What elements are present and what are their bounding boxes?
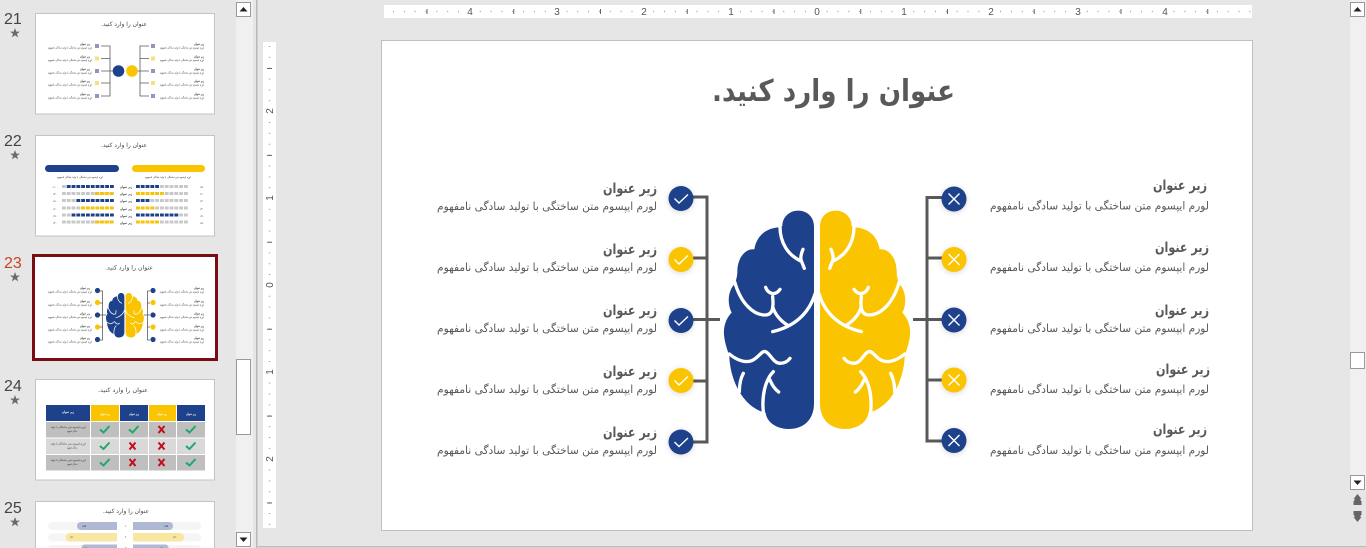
thumbnail: slide 23 (selected): لورم ایپسوم متن ساختگی با تولید سادگی نامفهوم — [160, 315, 204, 320]
thumbnail: slide 25: عنوان را وارد کنید. — [103, 508, 149, 515]
right item 2 — [942, 240, 1209, 274]
thumbnail: slide 23 (selected): لورم ایپسوم متن ساختگی با تولید سادگی نامفهوم — [160, 302, 204, 308]
left item 4: لورم ایپسوم متن ساختگی با تولید سادگی نامفهوم — [437, 383, 657, 396]
thumbnail: slide 23 (selected): زیر عنوان — [194, 336, 204, 340]
vertical ruler: 1 — [265, 195, 276, 201]
thumbnail: slide 21: زیر عنوان — [80, 67, 90, 71]
horizontal ruler: 4 — [467, 7, 473, 18]
thumbnail: slide 22: ٪۵۰ — [200, 222, 204, 225]
thumbnail: slide 22: ٪۳۰ — [200, 200, 204, 203]
thumbnail: slide 22: زیر عنوان — [120, 185, 132, 189]
right item 1: لورم ایپسوم متن ساختگی با تولید سادگی نامفهوم — [990, 200, 1209, 212]
right item 4: لورم ایپسوم متن ساختگی با تولید سادگی نامفهوم — [990, 383, 1209, 396]
vertical ruler: 0 — [265, 282, 276, 288]
thumbnail: slide 21: زیر عنوان — [194, 54, 204, 58]
right item 3 — [942, 303, 1209, 335]
connector: left bracket — [693, 197, 720, 442]
horizontal ruler: 3 — [1075, 7, 1081, 18]
horizontal ruler — [384, 5, 1252, 18]
thumbnail: slide 21: زیر عنوان — [194, 67, 204, 71]
thumbnail: slide 24: زیر عنوان — [100, 412, 110, 416]
thumbnail: slide 21: لورم ایپسوم متن ساختگی با تولید سادگی نامفهوم — [160, 46, 204, 50]
right item 5: لورم ایپسوم متن ساختگی با تولید سادگی نامفهوم — [990, 444, 1209, 457]
slide canvas — [382, 40, 1252, 530]
slide number 24 — [4, 378, 22, 404]
thumbnail: slide 23 (selected): لورم ایپسوم متن ساختگی با تولید سادگی نامفهوم — [48, 315, 92, 320]
horizontal ruler: 1 — [901, 7, 907, 18]
right item 2: لورم ایپسوم متن ساختگی با تولید سادگی نامفهوم — [990, 261, 1209, 274]
left item 4: زیر عنوان — [603, 364, 657, 380]
slide number 21 — [4, 11, 22, 37]
horizontal ruler: 1 — [728, 7, 734, 18]
brain: right yellow hemisphere — [819, 211, 910, 429]
thumbnail: slide 22: ٪۴۰ — [53, 222, 57, 225]
left item 5 — [437, 425, 694, 457]
brain: left blue hemisphere — [724, 211, 815, 429]
thumbnail: slide 21: لورم ایپسوم متن ساختگی با تولید سادگی نامفهوم — [48, 70, 92, 76]
thumbnail: slide 23 (selected): لورم ایپسوم متن ساختگی با تولید سادگی نامفهوم — [48, 302, 92, 308]
thumbnail: slide 22: زیر عنوان — [120, 214, 132, 218]
left item 4 — [437, 364, 694, 396]
thumbnail: slide 25: ٪۵۵ — [164, 525, 169, 528]
left item 2: لورم ایپسوم متن ساختگی با تولید سادگی نامفهوم — [437, 261, 657, 274]
vertical ruler: 1 — [265, 369, 276, 375]
thumbnail: slide 24: زیر عنوان — [157, 412, 167, 416]
thumbnail: slide 25: ٪۷۰ — [70, 536, 74, 539]
thumbnail: slide 24: عنوان را وارد کنید. — [98, 387, 148, 394]
thumbnail: slide 22: ٪۶۰ — [53, 208, 57, 211]
thumbnail: slide 24: لورم ایپسوم متن ساختگی با تولید — [50, 425, 86, 430]
thumbnail: slide 23 (selected): زیر عنوان — [80, 336, 90, 340]
thumbnail: slide 24: زیر عنوان — [62, 410, 74, 414]
thumbnail: slide 22: زیر عنوان — [120, 199, 132, 203]
thumbnail: slide 24: سادگی نامفهوم — [67, 446, 77, 450]
right item 1: زیر عنوان — [1153, 178, 1207, 194]
slide number 22 — [4, 133, 22, 159]
thumbnail: slide 22: ٪۴۰ — [53, 193, 57, 196]
thumbnail: slide 23 (selected): زیر عنوان — [194, 312, 204, 316]
left item 3 — [437, 303, 694, 335]
thumbnail: slide 25: ۰۱ — [124, 525, 126, 528]
thumbnail: slide 25 — [36, 502, 214, 548]
thumbnail: slide 21: زیر عنوان — [194, 42, 204, 46]
thumbnail: slide 21: زیر عنوان — [80, 42, 90, 46]
right item 4: زیر عنوان — [1156, 362, 1210, 378]
right item 1 — [942, 178, 1209, 212]
left item 2: زیر عنوان — [603, 242, 657, 258]
thumbnail: slide 21: زیر عنوان — [80, 54, 90, 58]
thumbnail: slide 24: زیر عنوان — [129, 412, 139, 416]
slide number 23 — [4, 255, 22, 281]
horizontal ruler: 0 — [814, 7, 820, 18]
thumbnail: slide 23 (selected): لورم ایپسوم متن ساختگی با تولید سادگی نامفهوم — [160, 290, 204, 294]
slide number 21: 21 — [4, 11, 22, 28]
thumbnail: slide 25: ٪۵۵ — [82, 525, 87, 528]
connector: right bracket — [913, 198, 942, 441]
thumbnail: slide 23 (selected): زیر عنوان — [194, 324, 204, 328]
right item 5 — [942, 422, 1209, 457]
horizontal ruler: 3 — [554, 7, 560, 18]
thumbnail: slide 21: زیر عنوان — [80, 79, 90, 83]
thumbnail: slide 23 (selected): زیر عنوان — [80, 312, 90, 316]
left item 1: زیر عنوان — [603, 181, 657, 197]
thumbnail: slide 22: لورم ایپسوم متن ساختگی با تولید سادگی نامفهوم — [145, 175, 191, 180]
vertical ruler: 2 — [265, 108, 276, 114]
thumbnail: slide 22: زیر عنوان — [120, 192, 132, 196]
thumbnail: slide 24: سادگی نامفهوم — [67, 462, 77, 467]
thumbnail: slide 21: عنوان را وارد کنید. — [101, 21, 147, 28]
slide number 22: 22 — [4, 133, 22, 150]
right item 3: لورم ایپسوم متن ساختگی با تولید سادگی نامفهوم — [990, 322, 1209, 335]
thumbnail: slide 22: لورم ایپسوم متن ساختگی با تولید سادگی نامفهوم — [57, 175, 103, 180]
thumbnail: slide 22: زیر عنوان — [120, 221, 132, 225]
thumbnail: slide 23 (selected): لورم ایپسوم متن ساختگی با تولید سادگی نامفهوم — [48, 340, 92, 344]
thumbnail: slide 23 (selected): عنوان را وارد کنید. — [105, 264, 153, 272]
status line — [258, 546, 1366, 548]
thumbnail: slide 24: لورم ایپسوم متن ساختگی با تولید — [50, 442, 86, 446]
slide number 23: 23 — [4, 255, 22, 272]
left item 1: لورم ایپسوم متن ساختگی با تولید سادگی نامفهوم — [437, 200, 657, 213]
thumbnail: slide 23 (selected): زیر عنوان — [194, 286, 204, 290]
right item 4 — [942, 362, 1210, 396]
thumbnail: slide 22: ٪۴۰ — [200, 208, 204, 211]
thumbnail: slide 21: لورم ایپسوم متن ساختگی با تولید سادگی نامفهوم — [160, 96, 204, 100]
slide number 25: 25 — [4, 500, 22, 517]
thumbnail: slide 24: لورم ایپسوم متن ساختگی با تولید — [50, 458, 86, 463]
thumbnail: slide 23 (selected): زیر عنوان — [194, 299, 204, 303]
thumbnail: slide 22: ٪۱۰۰ — [52, 186, 58, 189]
thumbnail: slide 21 — [36, 14, 214, 114]
thumbnail: slide 21: لورم ایپسوم متن ساختگی با تولید سادگی نامفهوم — [48, 58, 92, 63]
left item 2 — [437, 242, 694, 274]
left item 5: لورم ایپسوم متن ساختگی با تولید سادگی نامفهوم — [437, 444, 657, 457]
thumbnail panel — [4, 11, 216, 548]
left item 3: زیر عنوان — [603, 303, 657, 319]
title: عنوان را وارد کنید. — [712, 74, 955, 109]
thumbnail: slide 21: زیر عنوان — [80, 92, 90, 96]
thumbnail: slide 23 (selected): زیر عنوان — [80, 286, 90, 290]
thumbnail: slide 21: لورم ایپسوم متن ساختگی با تولید سادگی نامفهوم — [160, 70, 204, 76]
thumbnail: slide 24: زیر عنوان — [186, 412, 196, 416]
left item 1 — [437, 181, 694, 213]
horizontal ruler: 2 — [641, 7, 647, 18]
thumbnail: slide 22: ٪۵۰ — [200, 186, 204, 189]
thumbnail: slide 25: ۰۲ — [124, 536, 127, 539]
thumbnail: slide 22: عنوان را وارد کنید. — [101, 142, 147, 149]
thumbnail: slide 22 — [36, 136, 214, 236]
horizontal ruler: 4 — [1162, 7, 1168, 18]
thumbnail: slide 21: لورم ایپسوم متن ساختگی با تولید سادگی نامفهوم — [160, 58, 204, 63]
thumbnail: slide 21: لورم ایپسوم متن ساختگی با تولید سادگی نامفهوم — [48, 96, 92, 100]
thumbnail: slide 22: ٪۹۰ — [200, 215, 204, 218]
right item 3: زیر عنوان — [1155, 303, 1209, 319]
thumbnail: slide 22: زیر عنوان — [120, 207, 132, 211]
thumbnail: slide 22: ٪۶۰ — [200, 193, 204, 196]
thumbnail: slide 21: لورم ایپسوم متن ساختگی با تولید سادگی نامفهوم — [48, 82, 92, 88]
thumbnail: slide 21: زیر عنوان — [194, 92, 204, 96]
right item 2: زیر عنوان — [1155, 240, 1209, 256]
thumbnail: slide 25: ٪۷۰ — [173, 536, 177, 539]
vertical ruler: 2 — [265, 456, 276, 462]
thumbnail: slide 23 (selected): زیر عنوان — [80, 299, 90, 303]
thumbnail: slide 23 (selected) — [34, 256, 216, 360]
left item 3: لورم ایپسوم متن ساختگی با تولید سادگی نامفهوم — [437, 322, 657, 335]
horizontal ruler: 2 — [988, 7, 994, 18]
thumbnail: slide 24: سادگی نامفهوم — [67, 429, 77, 434]
left item 5: زیر عنوان — [603, 425, 657, 441]
brain illustration — [724, 211, 910, 429]
thumbnail: slide 23 (selected): زیر عنوان — [80, 324, 90, 328]
right scrollbar — [1350, 0, 1366, 522]
vertical ruler — [263, 42, 276, 528]
thumbnail: slide 23 (selected): لورم ایپسوم متن ساختگی با تولید سادگی نامفهوم — [160, 340, 204, 344]
thumbnail: slide 21: لورم ایپسوم متن ساختگی با تولید سادگی نامفهوم — [160, 82, 204, 88]
thumbnail: slide 21: لورم ایپسوم متن ساختگی با تولید سادگی نامفهوم — [48, 46, 92, 50]
thumbnail: slide 22: ٪۹۰ — [53, 215, 57, 218]
thumbnail: slide 21: زیر عنوان — [194, 79, 204, 83]
slide number 25 — [4, 500, 22, 526]
thumbnail: slide 23 (selected): لورم ایپسوم متن ساختگی با تولید سادگی نامفهوم — [48, 328, 92, 332]
thumbnail: slide 23 (selected): لورم ایپسوم متن ساختگی با تولید سادگی نامفهوم — [48, 290, 92, 294]
thumbnail: slide 23 (selected): لورم ایپسوم متن ساختگی با تولید سادگی نامفهوم — [160, 328, 204, 332]
thumbnail: slide 24 — [36, 380, 214, 480]
thumbnail: slide 22: ٪۸۰ — [53, 200, 57, 203]
right item 5: زیر عنوان — [1153, 422, 1207, 438]
slide number 24: 24 — [4, 378, 22, 395]
left scrollbar — [236, 0, 258, 548]
